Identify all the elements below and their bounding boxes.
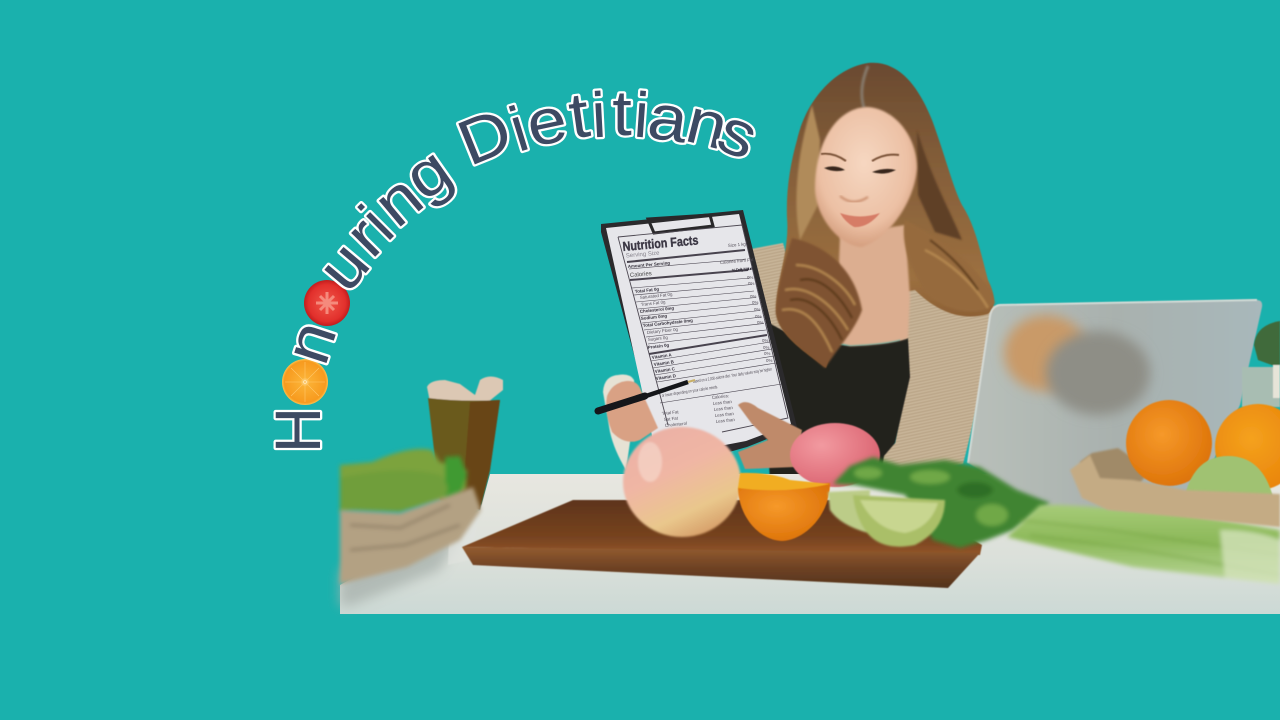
- green apple: [1185, 456, 1273, 497]
- letter g: g: [391, 133, 464, 214]
- letter D: D: [448, 95, 522, 180]
- nutrition label text: 0%: [757, 320, 763, 325]
- neck and chest: [832, 225, 910, 346]
- nutrition label text: Sodium 0mg: [641, 313, 668, 321]
- nutrition label text: Total Fat: [662, 409, 680, 416]
- letter r: r: [331, 203, 398, 270]
- straw basket: [340, 487, 481, 584]
- icon: tomato slice: [304, 280, 350, 326]
- laptop bright edge: [968, 300, 1257, 463]
- nutrition label text: Serving Size: [626, 251, 660, 259]
- nutrition label text: 0%: [748, 281, 754, 286]
- nutrition label text: Less than: [713, 399, 733, 406]
- cutting board: [462, 500, 982, 588]
- big apple: [623, 427, 741, 537]
- table shadow: [340, 535, 460, 606]
- letter i: i: [501, 92, 536, 165]
- clipboard: [601, 210, 797, 470]
- nutrition label text: 0%: [754, 307, 760, 312]
- nutrition label text: Less than: [715, 411, 735, 418]
- nutrition label rules: [627, 250, 782, 403]
- nutrition label frame: [618, 225, 788, 432]
- nutrition label text: Cholesterol: [665, 421, 687, 428]
- letter i: i: [346, 192, 407, 253]
- curved title: [262, 78, 768, 453]
- nutrition label text: Vitamin A: [651, 352, 673, 360]
- icon: orange slice: [282, 359, 328, 405]
- halved green apples: [828, 490, 945, 547]
- nutrition label text: Vitamin C: [654, 366, 676, 374]
- nutrition label text: 0%: [764, 351, 770, 356]
- nutrition label text: Amount Per Serving: [628, 260, 670, 269]
- nutrition label text: 0%: [752, 300, 758, 305]
- nutrition label text: Less than: [716, 417, 736, 424]
- letter i: i: [632, 79, 651, 151]
- nutrition label text: Sat Fat: [664, 415, 679, 422]
- letter e: e: [520, 83, 573, 161]
- nose and mouth: [840, 196, 868, 202]
- black top: [760, 318, 910, 480]
- letter n: n: [360, 161, 436, 241]
- halved orange: [738, 473, 830, 541]
- nutrition label text: 0%: [755, 314, 761, 319]
- orange left: [1126, 400, 1212, 486]
- nutrition label text: 0%: [762, 338, 768, 343]
- left hand holding pen: [603, 375, 658, 470]
- nutrition label text: % Daily Value*: [732, 266, 754, 273]
- laptop reflection: grey: [1046, 331, 1150, 415]
- nutrition label text: or lower depending on your calorie needs.: [661, 384, 718, 398]
- clip: [648, 215, 713, 233]
- letter s: s: [708, 94, 768, 174]
- letter t: t: [564, 79, 594, 152]
- nutrition label text: Vitamin D: [655, 373, 676, 381]
- eyes and brows: [821, 154, 899, 161]
- nutrition label text: Vitamin B: [653, 359, 674, 367]
- hair back: [776, 63, 994, 368]
- nutrition label text: Calories from Fat: [720, 257, 754, 265]
- nutrition label text: Sugars 0g: [648, 335, 669, 342]
- nutrition label text: Less than: [714, 405, 734, 412]
- nutrition label text: 0%: [763, 345, 769, 350]
- celery stalks: [1007, 505, 1280, 584]
- letter a: a: [644, 81, 693, 157]
- juice glass: [427, 376, 503, 565]
- left basket with mangoes: [340, 449, 481, 584]
- nutrition label text: Calories:: [712, 393, 729, 400]
- face: [815, 107, 917, 247]
- nutrition label text: Total Carbohydrate 0mg: [643, 318, 693, 328]
- nutrition label text: Protein 0g: [648, 342, 670, 350]
- nutrition label text: 0%: [766, 358, 772, 363]
- green mango: [340, 449, 467, 512]
- letter i: i: [590, 79, 608, 151]
- plant and wall right: [1242, 321, 1280, 407]
- right basket front: [1070, 455, 1280, 527]
- letter t: t: [612, 78, 632, 149]
- letter H: H: [262, 407, 334, 453]
- orange right: [1215, 404, 1280, 490]
- nutrition label text: Cholesterol 0mg: [640, 305, 675, 314]
- nutrition label text: based on a 2,000-calorie diet. Your daily values may be higher: [692, 366, 773, 384]
- nutrition label text: Trans Fat 0g: [641, 299, 666, 307]
- letter u: u: [304, 228, 384, 304]
- pen: [598, 380, 695, 411]
- letter n: n: [680, 85, 735, 164]
- nutrition label text: Nutrition Facts: [622, 232, 699, 254]
- cardigan: [745, 243, 997, 480]
- nutrition label text: Dietary Fiber 0g: [647, 327, 679, 335]
- laptop reflection: orange: [1004, 315, 1088, 391]
- right hand: [738, 402, 802, 469]
- nutrition label text: Calories: [630, 271, 652, 279]
- table: [340, 474, 1280, 614]
- photo: dietitian with clipboard: [598, 63, 997, 480]
- laptop: [968, 300, 1262, 530]
- nutrition label text: 0%: [747, 275, 753, 280]
- celery leaves: [833, 457, 1050, 548]
- nutrition label text: 0%: [750, 294, 756, 299]
- right basket back: [1080, 448, 1150, 490]
- hair strands: [782, 250, 988, 352]
- nutrition label text: Saturated Fat 0g: [640, 292, 673, 300]
- hair locks: [776, 66, 995, 368]
- pink apple: [790, 423, 880, 487]
- nutrition label text: Total Fat 0g: [635, 286, 660, 294]
- letter n: n: [271, 313, 351, 372]
- nutrition label text: Size 1 kg: [728, 241, 747, 248]
- nutrition label text: [622, 232, 773, 428]
